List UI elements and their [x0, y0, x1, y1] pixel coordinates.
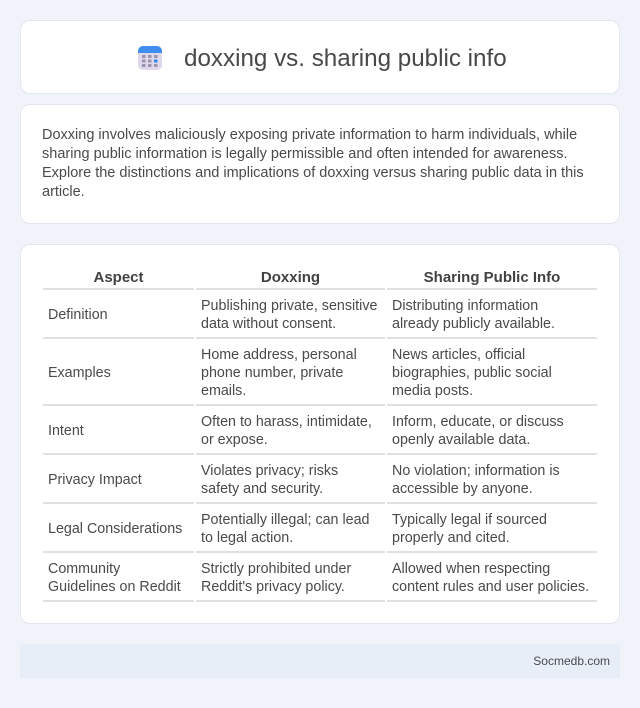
row: legal considerations: Potentially illegal; can lead [201, 512, 370, 528]
row: privacy impact [48, 463, 560, 497]
row: community guidelines: content rules and user policies. [392, 579, 589, 595]
row: intent: openly available data. [392, 432, 530, 448]
row: privacy impact: safety and security. [201, 481, 323, 497]
row: privacy impact: Violates privacy; risks [201, 463, 338, 479]
row: community guidelines: Community [48, 561, 120, 577]
row: definition [48, 298, 555, 332]
header: doxxing: Doxxing [261, 269, 320, 286]
row: intent: or expose. [201, 432, 268, 448]
row: examples: Examples [48, 365, 111, 381]
row: community guidelines [48, 561, 589, 595]
row: community guidelines: Guidelines on Reddit [48, 579, 181, 595]
row: community guidelines: Allowed when respecting [392, 561, 550, 577]
title card [20, 20, 620, 94]
intro text: Doxxing involves maliciously exposing private information to harm individuals, while [42, 127, 577, 143]
row: legal considerations: properly and cited. [392, 530, 510, 546]
intro text: article. [42, 184, 85, 200]
header: sharing public info: Sharing Public Info [424, 269, 560, 286]
comparison table [43, 269, 597, 602]
row: definition: Publishing private, sensitive [201, 298, 377, 314]
row: privacy impact: No violation; information is [392, 463, 560, 479]
row: legal considerations: Legal Considerations [48, 521, 182, 537]
icon: calendar [138, 46, 162, 70]
intro text [42, 127, 584, 200]
intro card [20, 104, 620, 224]
row: legal considerations: to legal action. [201, 530, 293, 546]
intro text: sharing public information is legally permissible and often intended for awareness. [42, 146, 568, 162]
row: definition: Definition [48, 307, 108, 323]
row: intent: Inform, educate, or discuss [392, 414, 564, 430]
row: definition: data without consent. [201, 316, 336, 332]
footer credit: Socmedb.com [533, 654, 610, 668]
row: examples: biographies, public social [392, 365, 552, 381]
row: community guidelines: Strictly prohibited under [201, 561, 351, 577]
row: intent: Intent [48, 423, 84, 439]
row: examples: Home address, personal [201, 347, 357, 363]
footer bar [20, 644, 620, 678]
row: definition: Distributing information [392, 298, 538, 314]
row: intent: Often to harass, intimidate, [201, 414, 372, 430]
row: legal considerations: Typically legal if sourced [392, 512, 547, 528]
row: definition: already publicly available. [392, 316, 555, 332]
row: examples [48, 347, 552, 399]
row: intent [48, 414, 564, 448]
row: privacy impact: Privacy Impact [48, 472, 142, 488]
row: examples: News articles, official [392, 347, 525, 363]
intro text: Explore the distinctions and implications of doxxing versus sharing public data in this [42, 165, 584, 181]
title: doxxing vs. sharing public info [184, 45, 507, 72]
header: aspect: Aspect [93, 269, 144, 286]
row: community guidelines: Reddit's privacy policy. [201, 579, 345, 595]
row: examples: media posts. [392, 383, 473, 399]
row: legal considerations [48, 512, 547, 546]
row: privacy impact: accessible by anyone. [392, 481, 533, 497]
row: examples: emails. [201, 383, 246, 399]
row: examples: phone number, private [201, 365, 343, 381]
table card [20, 244, 620, 624]
